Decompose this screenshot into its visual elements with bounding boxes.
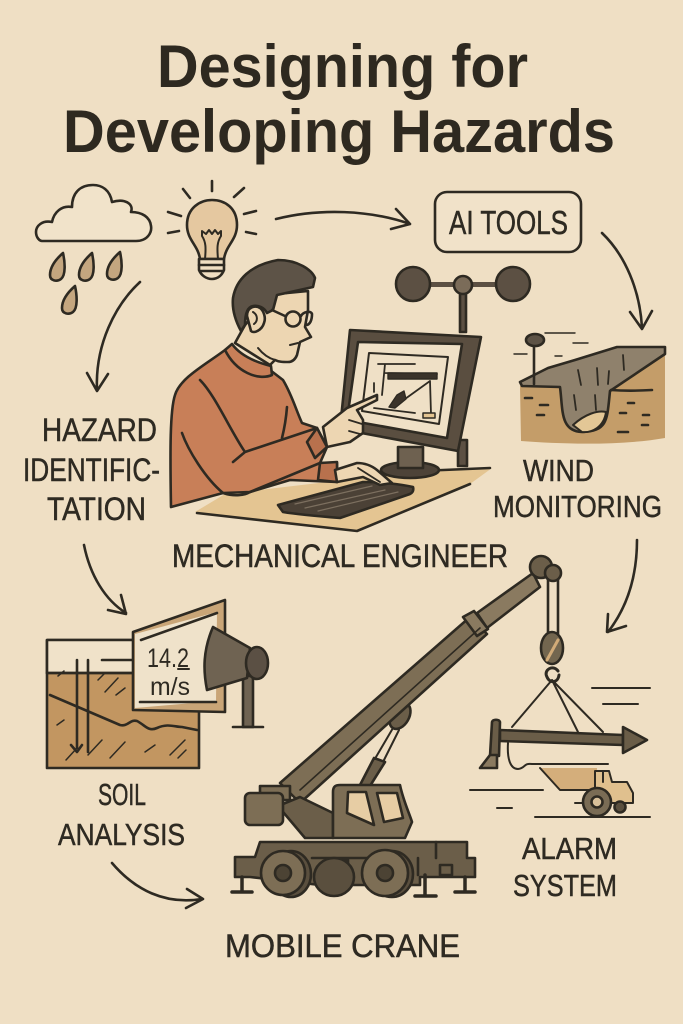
arrow: bulb to AI tools [276, 209, 410, 229]
arm seams [182, 380, 320, 495]
label: soil analysis: ANALYSIS [58, 817, 185, 852]
collar [225, 344, 272, 377]
chassis [235, 842, 475, 885]
outriggers [232, 875, 475, 896]
panel: desk [195, 468, 492, 531]
panel: soil analysis [47, 600, 268, 768]
superstructure [260, 786, 290, 800]
wheels [314, 858, 354, 896]
alarm horn [243, 676, 253, 727]
title: Developing Hazards [63, 98, 615, 165]
glasses [272, 310, 312, 326]
icon: monitor [340, 330, 481, 478]
typing hand [335, 463, 392, 485]
pointing hand [323, 395, 377, 447]
label: hazard identification: HAZARD [42, 412, 157, 448]
icon: rain cloud [36, 185, 151, 314]
label: mechanical engineer: MECHANICAL ENGINEER [172, 538, 508, 574]
label: wind monitoring [493, 453, 662, 524]
motion lines [470, 688, 650, 817]
panel: mobile crane [232, 556, 563, 897]
panel: mechanical engineer figure [170, 260, 392, 507]
label: alarm system: SYSTEM [513, 868, 617, 903]
arrow: cloud to hazard identification [87, 282, 140, 391]
callout: AI tools: AI TOOLS [449, 204, 568, 241]
hydraulic ram [360, 758, 385, 786]
arrow: AI tools to excavation [602, 233, 652, 329]
label: hazard identification [23, 412, 160, 527]
wind readout card [133, 600, 225, 712]
label: soil analysis: SOIL [98, 777, 146, 812]
hair [233, 260, 315, 331]
icon: anemometer [396, 267, 530, 332]
icon: light bulb [168, 181, 256, 279]
title: Designing for [157, 33, 528, 100]
arrow: hazard identification to soil analysis [84, 545, 126, 614]
icon: keyboard [278, 482, 413, 518]
label: hazard identification: IDENTIFIC- [23, 452, 160, 488]
telescopic boom [477, 573, 540, 628]
label: soil analysis [58, 777, 185, 852]
label: wind monitoring: WIND [523, 453, 594, 488]
ear [247, 307, 265, 332]
callout: AI tools [435, 192, 581, 252]
label: alarm system: ALARM [522, 831, 617, 866]
neck and face [235, 291, 311, 365]
label: alarm system [513, 831, 617, 903]
hoist cable and hook block [548, 578, 558, 640]
panel: suspended load and dump truck [470, 680, 650, 817]
arrow: soil analysis to mobile crane [112, 863, 203, 908]
sweater torso [170, 350, 337, 507]
panel: soil analysis: m/s [150, 673, 190, 701]
panel: soil analysis: 14.2 [147, 643, 189, 673]
label: hazard identification: TATION [47, 491, 146, 527]
dump truck [540, 768, 597, 790]
title [63, 33, 615, 165]
icon: excavation with warning lamp [514, 333, 665, 444]
label: mobile crane: MOBILE CRANE [225, 928, 460, 964]
arrow: wind monitoring to alarm system [607, 540, 637, 632]
